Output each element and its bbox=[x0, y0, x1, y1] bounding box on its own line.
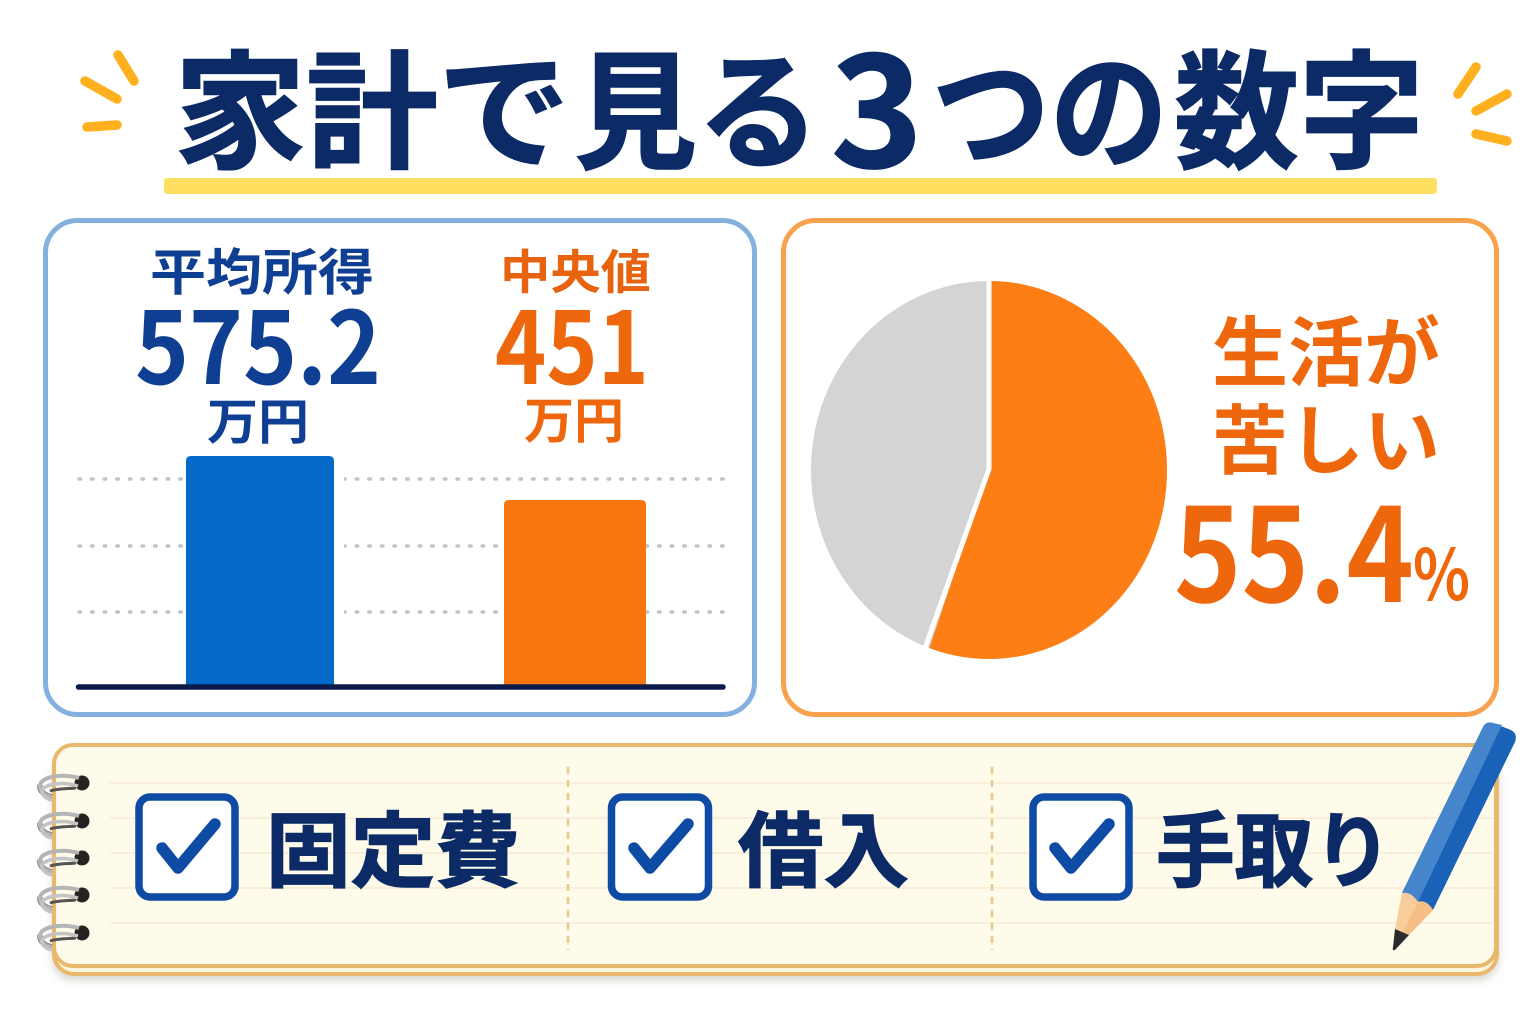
value: 451: 451 bbox=[495, 268, 649, 413]
unit: blue: 万円 bbox=[207, 383, 309, 454]
title: 数字 bbox=[1174, 10, 1424, 195]
label: median: 中央値 bbox=[500, 234, 651, 303]
item: take-home pay: 手取り bbox=[1156, 785, 1392, 904]
title bbox=[174, 0, 1424, 211]
panel: pie chart bbox=[784, 220, 1496, 714]
label: life is hard: 苦しい bbox=[1212, 380, 1440, 490]
icon: checkbox 1 bbox=[139, 797, 235, 897]
icon: right sparkle bbox=[1458, 67, 1507, 141]
value: 55.4%: 55.4 bbox=[1174, 452, 1414, 640]
title underline bbox=[164, 178, 1437, 194]
item: fixed costs: 固定費 bbox=[266, 785, 520, 904]
title: つの bbox=[932, 10, 1168, 195]
panel: notebook checklist bbox=[40, 745, 1497, 974]
unit: orange: 万円 bbox=[524, 382, 624, 453]
value: 575.2: 575.2 bbox=[135, 268, 381, 413]
icon: pencil bbox=[1393, 722, 1516, 950]
chart baseline bbox=[78, 684, 723, 690]
icon: checkbox 2 bbox=[612, 797, 708, 897]
pie chart bbox=[811, 270, 1180, 670]
title: 家計で bbox=[174, 10, 570, 195]
panel: income bar chart bbox=[46, 220, 754, 714]
icon: spiral binding bbox=[40, 776, 90, 950]
icon: checkbox 3 bbox=[1033, 797, 1129, 897]
icon: left sparkle bbox=[85, 55, 134, 127]
item: debt: 借入 bbox=[738, 785, 909, 904]
bar: median bbox=[504, 500, 646, 685]
bar: average bbox=[186, 456, 334, 685]
value: 55.4%: % bbox=[1413, 520, 1470, 621]
label: life is hard: 生活が bbox=[1212, 292, 1440, 402]
title: 見る bbox=[574, 10, 820, 195]
label: average income: 平均所得 bbox=[150, 233, 374, 305]
label: life is hard bbox=[1212, 292, 1440, 490]
